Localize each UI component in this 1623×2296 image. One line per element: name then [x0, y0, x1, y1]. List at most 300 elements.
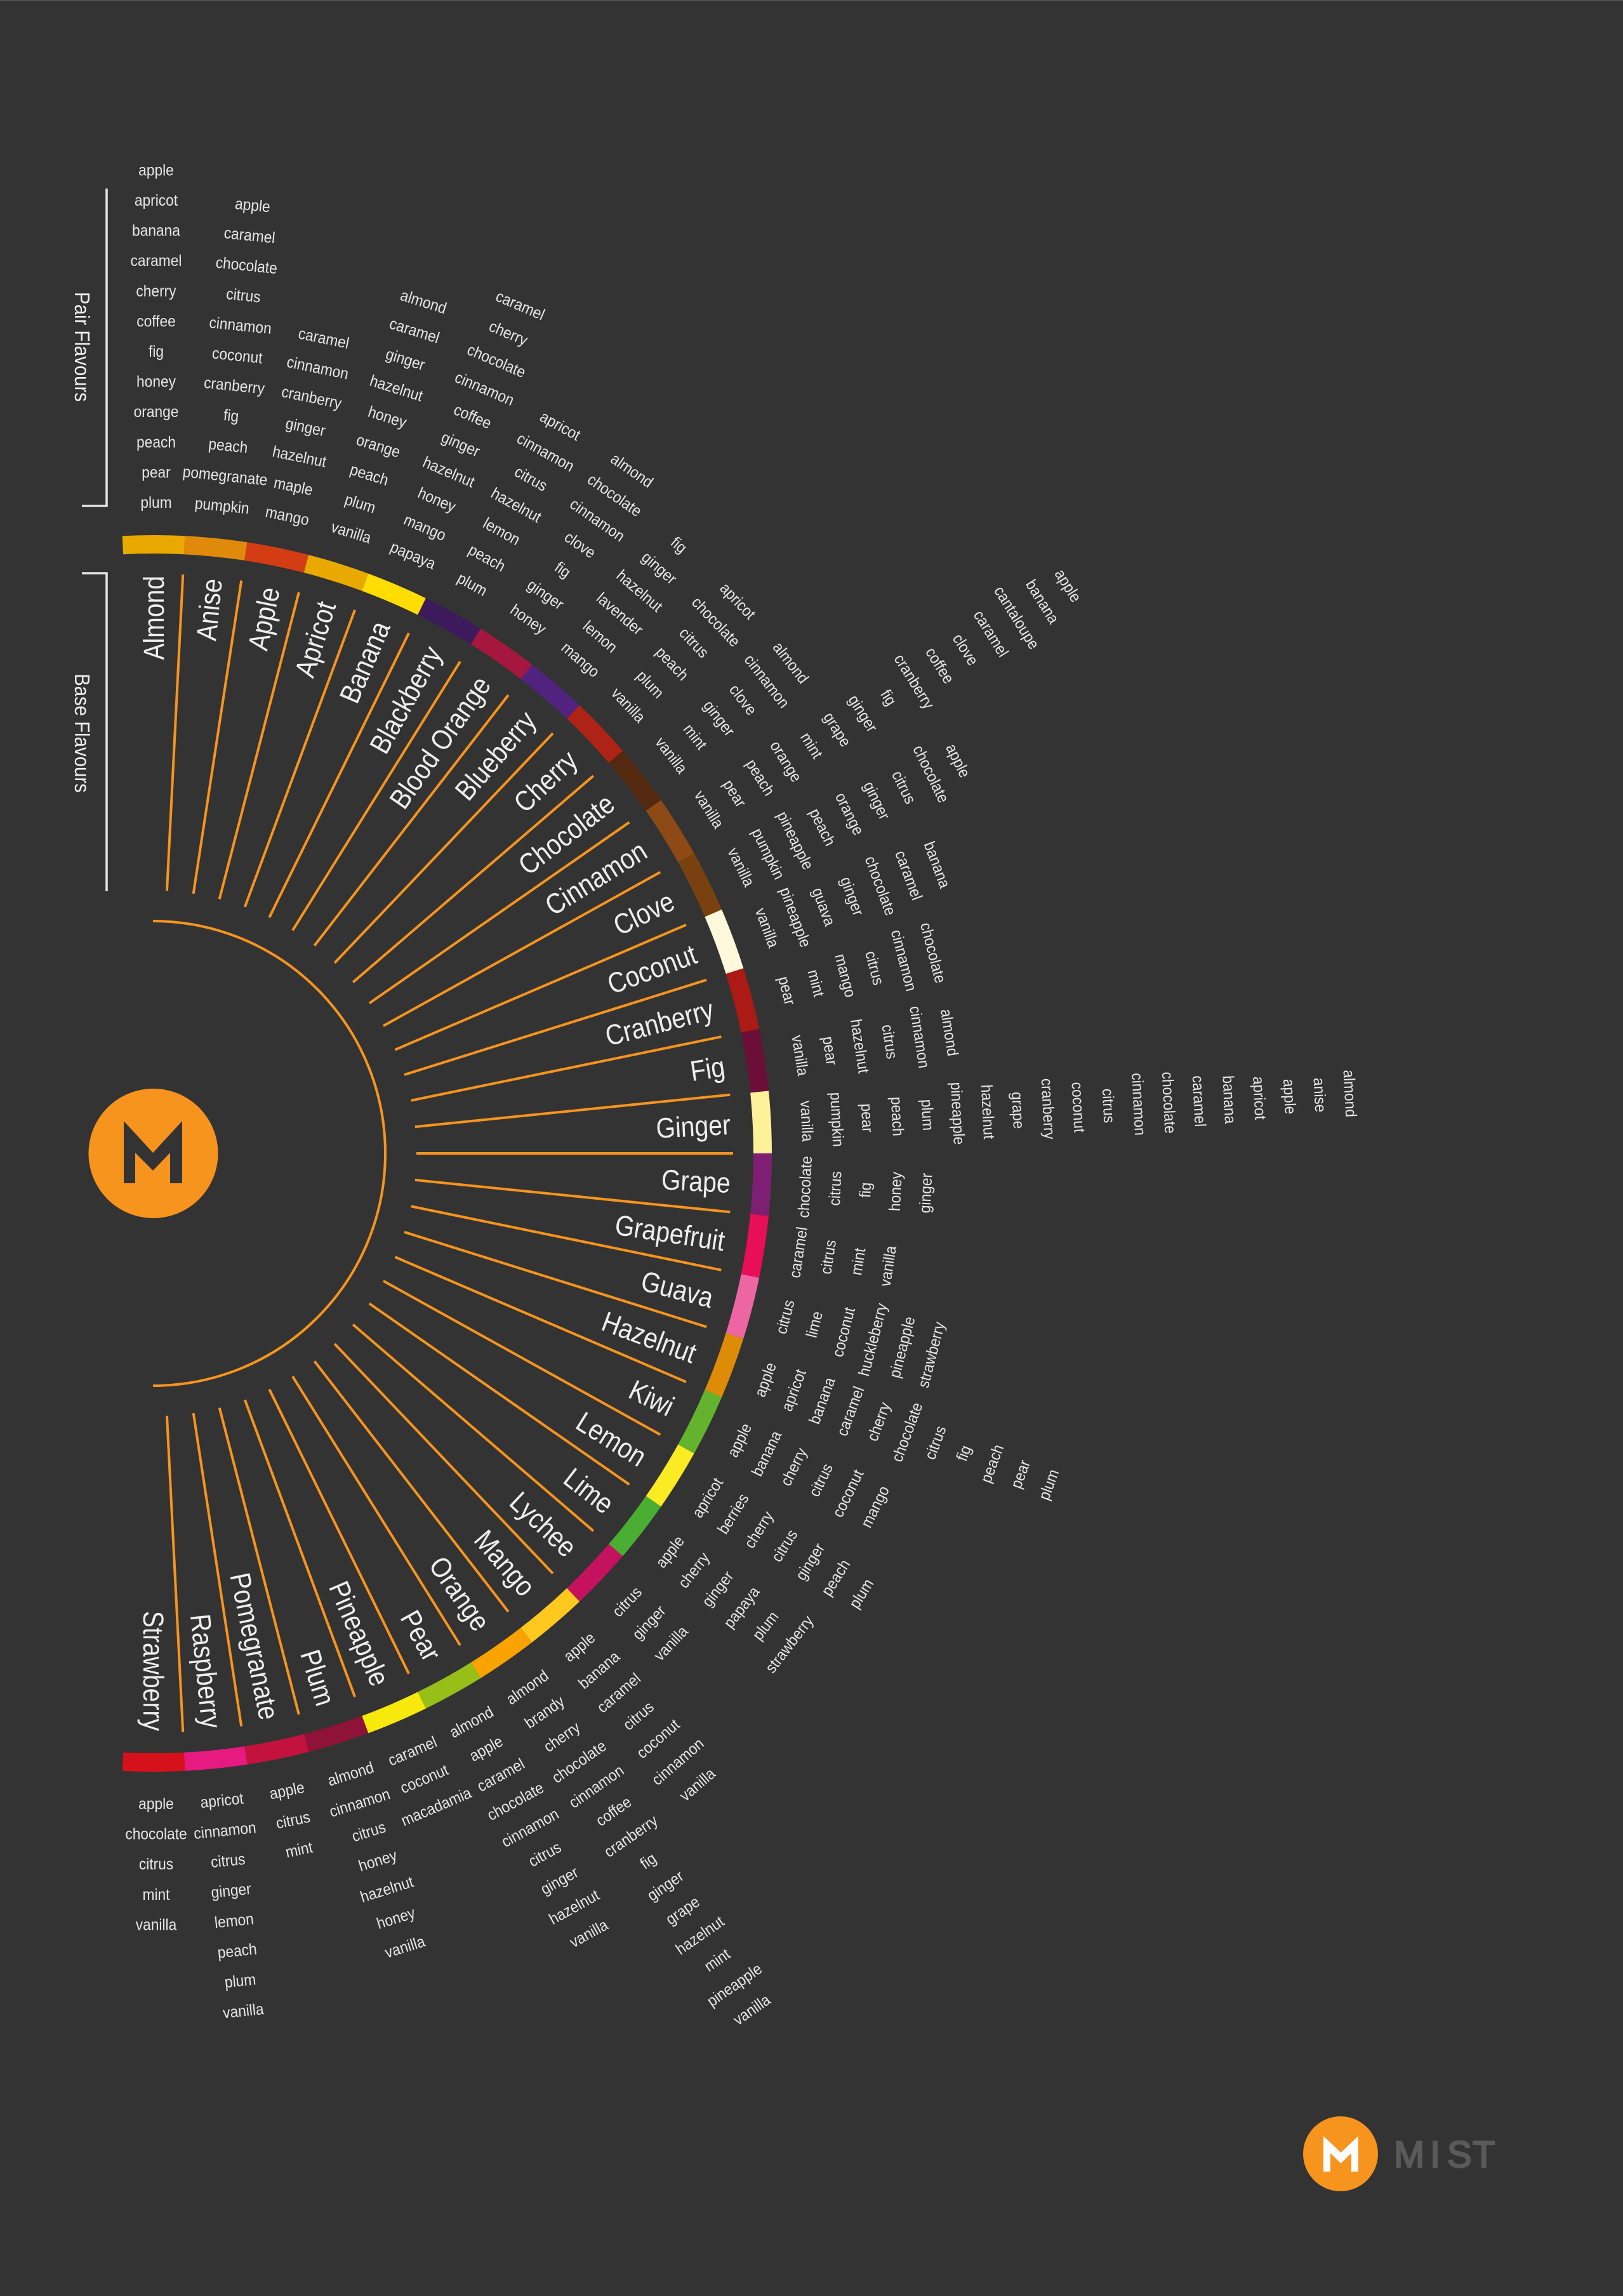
pair list: Plum: [318, 1756, 437, 1965]
pair list: Fig: [786, 1000, 963, 1088]
pair list: Apple: hazelnut: [271, 442, 328, 471]
pair list: Lime: cherry: [675, 1549, 713, 1592]
pair list: Clove: peach: [805, 806, 839, 849]
pair list: Strawberry: chocolate: [125, 1826, 187, 1843]
pair list: Mango: [550, 1620, 727, 1812]
text block: base flavour labels: Pear: [394, 1605, 447, 1666]
pair list: Lychee: vanilla: [651, 1622, 692, 1664]
text block: base flavour labels: Lime: [558, 1462, 620, 1520]
chart: radial divider lines: [167, 574, 733, 1732]
pair list: Pear: chocolate: [484, 1779, 547, 1824]
text block: base flavour labels: Cranberry: [602, 993, 717, 1052]
pair list: Almond: fig: [149, 343, 164, 361]
pair list: Cinnamon: ginger: [844, 692, 881, 736]
pair list: Hazelnut: citrus: [922, 1423, 950, 1462]
pair list: Ginger: pear: [857, 1103, 877, 1133]
pair list: Fig: vanilla: [788, 1034, 812, 1077]
pair list: Anise: pumpkin: [194, 494, 250, 518]
pair list: Cinnamon: orange: [766, 738, 805, 785]
pair list: Cranberry: citrus: [861, 949, 887, 987]
pair list: Ginger: peach: [887, 1096, 907, 1136]
pair list: Pomegranate: apple: [268, 1779, 306, 1803]
pair list: Banana: hazelnut: [420, 453, 477, 491]
pair list: Cranberry: mint: [804, 968, 828, 999]
pair list: Blueberry: [553, 521, 706, 685]
pair list: Pear: cinnamon: [498, 1805, 562, 1851]
pair list: Cranberry: chocolate: [917, 921, 949, 985]
text block: base flavour labels: Plum: [294, 1646, 341, 1709]
pair list: Plum: vanilla: [383, 1932, 428, 1962]
pair list: Pear: hazelnut: [546, 1886, 602, 1928]
pair list: Coconut: [748, 832, 956, 960]
pair list: Fig: almond: [937, 1008, 962, 1058]
pair list: Cinnamon: vanilla: [691, 788, 727, 832]
pair list: Pomegranate: citrus: [274, 1808, 312, 1833]
pair list: Lemon: cherry: [741, 1508, 778, 1551]
pair list: Ginger: cranberry: [1037, 1078, 1058, 1139]
pair list: Banana: ginger: [439, 428, 482, 461]
pair list: Raspberry: ginger: [210, 1880, 252, 1902]
pair list: Cinnamon: pear: [719, 776, 750, 811]
pair list: Ginger: vanilla: [797, 1100, 816, 1143]
pair list: Guava: huckleberry: [855, 1301, 891, 1378]
pair list: Blueberry: mango: [558, 639, 603, 681]
pair list: Hazelnut: apple: [751, 1360, 780, 1400]
pair list: Anise: caramel: [223, 224, 276, 247]
pair list: Raspberry: citrus: [210, 1850, 246, 1871]
pair list: Pomegranate: [268, 1779, 318, 1862]
pair list: Lime: papaya: [720, 1583, 764, 1631]
pair list: Orange: cinnamon: [566, 1762, 627, 1812]
pair list: Cherry: [600, 573, 765, 734]
heading: Pair Flavours bracket: [70, 189, 107, 506]
pair list: Apricot: caramel: [387, 315, 442, 347]
pair list: Orange: cherry: [540, 1718, 583, 1756]
pair list: Orange: brandy: [522, 1692, 568, 1732]
pair list: Anise: cinnamon: [208, 314, 272, 338]
pair list: Banana: honey: [415, 484, 458, 516]
pair list: Cinnamon: mint: [797, 729, 826, 762]
pair list: Coconut: pineapple: [776, 885, 814, 950]
pair list: Lemon: peach: [818, 1556, 854, 1599]
text block: base flavour labels: [137, 576, 731, 1731]
pair list: Apricot: [322, 286, 453, 550]
pair list: Anise: [179, 192, 296, 519]
pair list: Almond: apricot: [135, 192, 178, 209]
pair list: Mango: vanilla: [676, 1765, 719, 1805]
pair list: Ginger: plum: [917, 1099, 937, 1131]
pair list: Apricot: peach: [348, 461, 390, 489]
pair list: Apple: cinnamon: [285, 353, 350, 383]
pair list: Fig: citrus: [878, 1023, 901, 1060]
pair list: Blood Orange: [498, 446, 663, 645]
pair list: Orange: cranberry: [601, 1812, 661, 1861]
pair list: Ginger: almond: [1339, 1070, 1360, 1118]
pair list: Plum: citrus: [350, 1818, 388, 1846]
pair list: Lemon: plum: [845, 1576, 878, 1612]
pair list: Cherry: apricot: [716, 580, 759, 623]
pair list: Banana: [381, 285, 552, 576]
text block: base flavour labels: Lemon: [571, 1405, 652, 1473]
pair list: Cinnamon: cranberry: [890, 651, 937, 712]
pair list: Ginger: pineapple: [947, 1082, 968, 1145]
pair list: Lime: [642, 1520, 818, 1676]
pair list: Cinnamon: fig: [877, 686, 900, 709]
pair list: Grape: [795, 1156, 937, 1224]
pair list: Blood Orange: chocolate: [584, 470, 645, 521]
inner semicircle arc: [153, 921, 385, 1386]
pair list: Raspberry: cinnamon: [193, 1819, 257, 1843]
pair list: Anise: citrus: [225, 285, 262, 307]
pair list: Lychee: citrus: [609, 1583, 646, 1621]
pair list: Cinnamon: [682, 551, 1094, 844]
pair list: Orange: vanilla: [730, 1991, 774, 2029]
pair list: Blood Orange: clove: [561, 528, 599, 562]
heading: Pair Flavours bracket: Pair Flavours: [70, 292, 94, 402]
pair list: Almond: apple: [138, 161, 174, 180]
pair list: Hazelnut: chocolate: [888, 1400, 927, 1464]
pair list: Coconut: caramel: [891, 848, 925, 903]
pair list: Clove: pineapple: [773, 809, 817, 873]
pair list: Ginger: [796, 1062, 1360, 1153]
pair list: Orange: mint: [701, 1945, 734, 1975]
pair list: Banana: coffee: [451, 401, 494, 433]
pair list: Kiwi: cherry: [777, 1445, 811, 1489]
pair list: Pear: vanilla: [567, 1916, 611, 1951]
pair list: Orange: pineapple: [704, 1960, 765, 2010]
text block: base flavour labels: Coconut: [603, 938, 701, 1000]
text block: base flavour labels: Blood Orange: [383, 670, 497, 814]
pair list: Apple: caramel: [297, 324, 350, 352]
pair list: Hazelnut: cherry: [864, 1400, 894, 1443]
pair list: Cranberry: cinnamon: [887, 928, 920, 993]
pair list: Kiwi: [720, 1414, 895, 1534]
pair list: Blackberry: plum: [454, 569, 490, 600]
text block: base flavour labels: Blackberry: [363, 640, 448, 759]
pair list: Hazelnut: banana: [805, 1375, 839, 1426]
pair list: Kiwi: apple: [724, 1421, 755, 1460]
pair list: Lychee: [607, 1581, 692, 1664]
icon: Mist brand logo: MIST: [1394, 2134, 1495, 2175]
pair list: Cherry: citrus: [675, 624, 712, 661]
pair list: Raspberry: lemon: [214, 1910, 255, 1932]
pair list: Ginger: banana: [1219, 1075, 1239, 1125]
pair list: Almond: banana: [132, 222, 181, 240]
text block: base flavour labels: Almond: [138, 576, 170, 660]
pair list: Grape: ginger: [916, 1172, 936, 1214]
pair list: Grape: citrus: [826, 1171, 845, 1206]
pair list: Lemon: citrus: [768, 1527, 802, 1565]
pair list: Ginger: apricot: [1249, 1076, 1269, 1120]
pair list: Mango: caramel: [593, 1669, 644, 1716]
pair list: Coconut: ginger: [837, 875, 867, 919]
pair list: Hazelnut: pear: [1007, 1457, 1034, 1491]
pair list: Guava: lime: [803, 1310, 826, 1339]
pair list: Ginger: pumpkin: [826, 1092, 847, 1147]
pair list: Almond: cherry: [136, 282, 176, 300]
pair list: Fig: cinnamon: [906, 1005, 933, 1070]
pair list: Grapefruit: citrus: [817, 1238, 840, 1275]
text block: base flavour labels: Cinnamon: [540, 835, 653, 922]
pair list: Mango: banana: [575, 1647, 624, 1693]
pair list: Cranberry: [770, 920, 950, 1023]
pair list: Pomegranate: mint: [284, 1838, 315, 1862]
pair list: Apricot: hazelnut: [368, 372, 425, 406]
text block: base flavour labels: Guava: [638, 1264, 717, 1314]
pair list: Clove: orange: [831, 790, 867, 838]
pair list: Anise: pomegranate: [182, 463, 268, 489]
pair list: Almond: caramel: [131, 252, 182, 270]
pair list: Anise: chocolate: [215, 254, 278, 278]
pair list: Apple: cranberry: [280, 383, 343, 413]
pair list: Hazelnut: peach: [977, 1442, 1007, 1485]
pair list: Hazelnut: plum: [1035, 1467, 1063, 1503]
pair list: Orange: [497, 1662, 783, 2035]
pair list: Blueberry: ginger: [638, 548, 680, 588]
pair list: Ginger: apple: [1280, 1078, 1299, 1115]
pair list: Ginger: cinnamon: [1128, 1073, 1149, 1136]
text block: base flavour labels: Cherry: [508, 744, 583, 819]
text block: base flavour labels: Lychee: [504, 1485, 583, 1563]
pair list: Lime: apple: [653, 1532, 688, 1572]
text block: base flavour labels: Orange: [423, 1551, 496, 1637]
pair list: Strawberry: mint: [143, 1886, 170, 1904]
pair list: Blueberry: fig: [667, 534, 691, 557]
pair list: Pear: citrus: [526, 1838, 564, 1871]
pair list: Hazelnut: fig: [953, 1443, 975, 1464]
pair list: Ginger: anise: [1309, 1077, 1329, 1113]
text block: pair flavour columns: [125, 161, 1360, 2035]
text block: base flavour labels: Pineapple: [323, 1577, 395, 1690]
pair list: Orange: hazelnut: [673, 1913, 728, 1958]
pair list: Apricot: vanilla: [329, 518, 374, 548]
pair list: Raspberry: apricot: [199, 1789, 244, 1812]
text block: base flavour labels: Pomegranate: [224, 1570, 285, 1723]
pair list: Strawberry: citrus: [139, 1855, 173, 1873]
pair list: Almond: honey: [136, 373, 176, 391]
pair list: Almond: peach: [136, 434, 176, 451]
pair list: Clove: apple: [942, 741, 974, 781]
chart: colour ring of base flavours: [123, 544, 764, 1763]
pair list: Lemon: ginger: [792, 1540, 828, 1584]
heading: Base Flavours bracket: [70, 573, 107, 891]
pair list: Apricot: honey: [366, 403, 409, 432]
pair list: Anise: cranberry: [203, 374, 265, 398]
pair list: Blueberry: lavender: [593, 589, 647, 639]
pair list: Chocolate: almond: [769, 639, 812, 687]
pair list: Clove: citrus: [888, 768, 919, 807]
pair list: Ginger: chocolate: [1158, 1072, 1179, 1134]
text block: base flavour labels: Mango: [468, 1524, 541, 1602]
text block: base flavour labels: Apple: [242, 585, 286, 653]
pair list: Anise: peach: [208, 435, 249, 457]
pair list: Plum: honey: [357, 1847, 399, 1875]
pair list: Guava: citrus: [772, 1298, 798, 1336]
pair list: Fig: hazelnut: [847, 1018, 873, 1075]
pair list: Banana: papaya: [388, 538, 439, 573]
pair list: Grapefruit: caramel: [786, 1226, 811, 1279]
pair list: Grape: fig: [856, 1182, 875, 1198]
pair list: Cinnamon: peach: [742, 756, 778, 799]
text block: base flavour labels: Hazelnut: [598, 1305, 701, 1369]
pair list: Blackberry: lemon: [480, 514, 523, 549]
pair list: Grapefruit: [786, 1226, 901, 1293]
pair list: Grape: chocolate: [795, 1156, 816, 1218]
pair list: Pear: apple: [467, 1732, 506, 1765]
text block: base flavour labels: Grape: [661, 1164, 731, 1199]
pair list: Guava: [767, 1278, 950, 1393]
pair list: Fig: pear: [819, 1035, 840, 1066]
text block: base flavour labels: Apricot: [289, 597, 342, 681]
pair list: Cinnamon: apple: [1050, 566, 1085, 606]
pair list: Banana: cherry: [486, 317, 530, 350]
pair list: Banana: chocolate: [465, 341, 528, 382]
pair list: Apple: [255, 324, 356, 531]
pair list: Anise: fig: [223, 406, 240, 426]
pair list: Kiwi: mango: [858, 1483, 893, 1530]
pair list: Apple: mango: [264, 503, 310, 529]
icon: Mist brand logo: [1303, 2116, 1495, 2191]
pair list: Raspberry: plum: [224, 1970, 256, 1992]
pair list: Banana: caramel: [493, 288, 547, 324]
pair list: Lemon: berries: [714, 1490, 753, 1537]
pair list: Lychee: ginger: [629, 1602, 670, 1643]
pair list: Orange: ginger: [644, 1867, 687, 1905]
pair list: Banana: mango: [401, 511, 449, 545]
pair list: Banana: cinnamon: [452, 368, 517, 409]
pair list: Cherry: vanilla: [607, 684, 649, 727]
pair list: Ginger: caramel: [1188, 1075, 1209, 1127]
pair list: Plum: almond: [326, 1759, 376, 1790]
pair list: Anise: apple: [234, 195, 271, 216]
pair list: Almond: coffee: [136, 312, 176, 331]
pair list: Guava: coconut: [829, 1305, 859, 1359]
pair list: Pear: ginger: [538, 1863, 581, 1899]
pair list: Hazelnut: apricot: [778, 1367, 810, 1414]
pair list: Cranberry: pear: [774, 974, 798, 1007]
pair list: Apple: maple: [272, 474, 314, 500]
pair list: Guava: pineapple: [886, 1315, 919, 1380]
pair list: Pear: [440, 1699, 621, 1957]
pair list: Chocolate: cinnamon: [740, 651, 793, 712]
pair list: Blackberry: [441, 403, 592, 607]
pair list: Cinnamon: banana: [1022, 576, 1063, 627]
pair list: Chocolate: vanilla: [651, 734, 691, 778]
pair list: Apricot: plum: [343, 491, 378, 517]
pair list: Clove: [719, 729, 979, 899]
icon: central M logo: [89, 1089, 218, 1218]
pair list: Cinnamon: cantaloupe: [990, 583, 1043, 653]
pair list: Clove: chocolate: [909, 743, 952, 806]
pair list: Clove: ginger: [859, 779, 893, 823]
pair list: Pineapple: coconut: [397, 1761, 451, 1798]
pair list: Lemon: apricot: [689, 1475, 727, 1521]
pair list: Cherry: chocolate: [688, 594, 743, 651]
pair list: Chocolate: [645, 633, 817, 786]
pair list: Cinnamon: grape: [819, 709, 854, 750]
pair list: Pear: caramel: [474, 1755, 527, 1796]
pair list: Guava: strawberry: [915, 1320, 949, 1390]
pair list: Almond: orange: [134, 403, 178, 421]
pair list: Apple: ginger: [284, 415, 327, 440]
pair list: Apricot: ginger: [383, 345, 427, 375]
pair list: Clove: vanilla: [724, 845, 758, 890]
pair list: Lime: ginger: [699, 1567, 738, 1610]
pair list: Lime: plum: [749, 1608, 783, 1644]
pair list: Ginger: hazelnut: [977, 1084, 998, 1140]
pair list: Hazelnut: [746, 1348, 1068, 1517]
pair list: Pear: almond: [447, 1703, 496, 1742]
pair list: Cinnamon: coffee: [922, 644, 957, 687]
pair list: Blackberry: hazelnut: [488, 484, 545, 527]
pair list: Ginger: coconut: [1068, 1082, 1089, 1133]
pair list: Pineapple: [374, 1729, 475, 1830]
pair list: Grapefruit: vanilla: [877, 1244, 900, 1288]
pair list: Clove: pumpkin: [748, 825, 788, 882]
text block: base flavour labels: Banana: [333, 616, 397, 708]
pair list: Pineapple: caramel: [385, 1733, 440, 1770]
pair list: Blackberry: apricot: [537, 408, 583, 444]
pair list: Orange: chocolate: [549, 1737, 610, 1787]
pair list: Hazelnut: caramel: [833, 1384, 868, 1438]
text block: base flavour labels: Strawberry: [137, 1611, 169, 1731]
pair list: Cinnamon: caramel: [970, 607, 1012, 660]
pair list: Mango: citrus: [619, 1698, 658, 1734]
pair list: Orange: grape: [663, 1893, 703, 1928]
pair list: Blood Orange: almond: [607, 450, 656, 492]
pair list: Almond: [131, 161, 182, 512]
pair list: Kiwi: banana: [748, 1428, 786, 1479]
text block: base flavour labels: Clove: [608, 885, 679, 941]
pair list: Almond: pear: [142, 463, 171, 482]
pair list: Blood Orange: fig: [551, 558, 574, 581]
pair list: Strawberry: [125, 1795, 187, 1934]
pair list: Apricot: almond: [398, 286, 449, 317]
pair list: Chocolate: mint: [680, 720, 710, 753]
pair list: Blood Orange: ginger: [524, 576, 567, 614]
pair list: Kiwi: coconut: [829, 1467, 868, 1520]
text block: base flavour labels: Blueberry: [449, 705, 542, 806]
pair list: Grape: honey: [886, 1171, 906, 1212]
pair list: Blood Orange: honey: [507, 601, 550, 638]
pair list: Blueberry: lemon: [580, 618, 621, 656]
pair list: Kiwi: citrus: [805, 1461, 837, 1500]
pair list: Chocolate: clove: [725, 681, 760, 719]
pair list: Coconut: guava: [808, 886, 838, 929]
heading: Base Flavours bracket: Base Flavours: [70, 674, 94, 793]
pair list: Cranberry: mango: [831, 952, 859, 999]
pair list: Blackberry: citrus: [512, 463, 550, 495]
pair list: Cherry: peach: [652, 643, 692, 684]
pair list: Pineapple: macadamia: [399, 1784, 475, 1830]
pair list: Lemon: [689, 1475, 881, 1617]
pair list: Blackberry: peach: [465, 541, 508, 576]
text block: base flavour labels: Grapefruit: [613, 1209, 727, 1257]
pair list: Plum: hazelnut: [358, 1873, 416, 1906]
pair list: Apricot: orange: [354, 431, 402, 461]
pair list: Coconut: banana: [920, 839, 953, 891]
pair list: Cinnamon: clove: [949, 631, 982, 669]
pair list: Cherry: plum: [633, 667, 667, 702]
text block: base flavour labels: Raspberry: [184, 1612, 227, 1730]
pair list: Mango: apple: [560, 1629, 599, 1666]
pair list: Lime: strawberry: [762, 1612, 818, 1676]
pair list: Orange: coffee: [593, 1793, 635, 1830]
pair list: Strawberry: apple: [138, 1795, 174, 1813]
pair list: Coconut: vanilla: [752, 906, 783, 950]
pair list: Blood Orange: cinnamon: [566, 495, 628, 546]
pair list: Raspberry: [190, 1789, 275, 2023]
